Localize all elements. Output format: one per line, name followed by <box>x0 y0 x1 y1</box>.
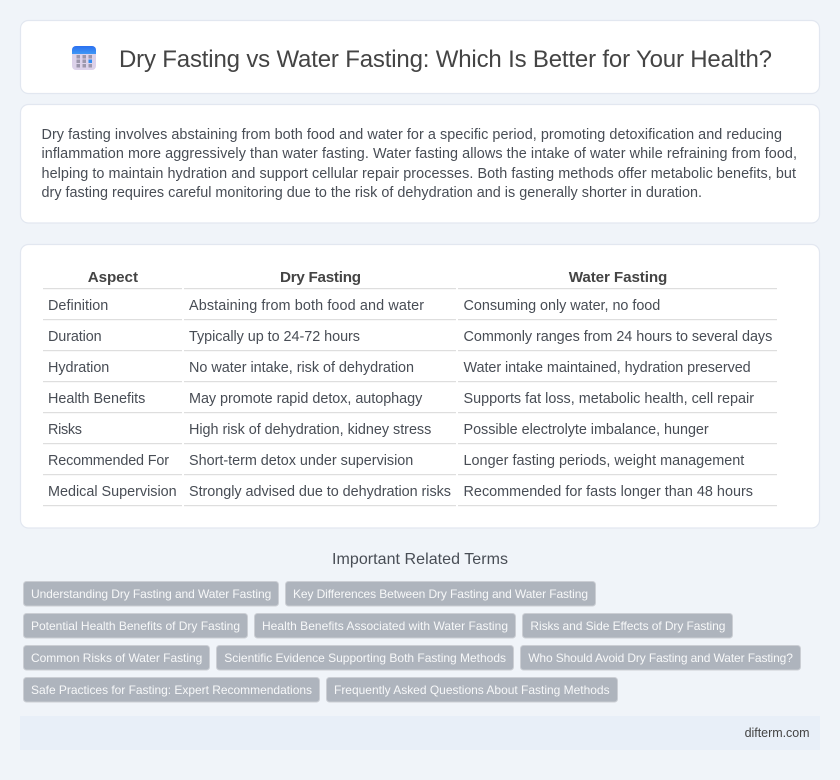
tag: understanding: Understanding Dry Fasting and Water Fasting <box>31 587 271 601</box>
table row: Definition: Consuming only water, no food <box>464 298 660 314</box>
tag: understanding <box>24 582 278 606</box>
table row: Recommended For: Recommended For <box>48 453 169 469</box>
tag: water fasting risks: Common Risks of Water Fasting <box>31 651 202 665</box>
tag: scientific evidence <box>216 646 514 670</box>
table row: Duration: Duration <box>48 329 102 345</box>
tag: safe practices <box>24 678 320 702</box>
table header row <box>43 269 777 289</box>
table row: Duration: Typically up to 24-72 hours <box>189 329 360 345</box>
tag: water fasting benefits: Health Benefits Associated with Water Fasting <box>262 619 508 633</box>
table header row: Water Fasting <box>569 269 667 286</box>
table row: Risks: Risks <box>48 422 82 438</box>
table header row: Aspect <box>88 269 138 286</box>
tag: frequently asked questions <box>326 678 618 702</box>
tag: frequently asked questions: Frequently Asked Questions About Fasting Methods <box>334 683 610 697</box>
panel: comparison table <box>20 244 820 528</box>
tag: who should avoid: Who Should Avoid Dry Fasting and Water Fasting? <box>528 651 793 665</box>
table row: Risks <box>43 422 777 444</box>
title: Dry Fasting vs Water Fasting: Which Is Better for Your Health? <box>119 46 772 73</box>
text block: introduction: helping to maintain hydration and support cellular repair processes. Both fasting methods offer metabolic benefits, but <box>42 166 796 182</box>
tag: key differences <box>286 582 596 606</box>
tag: water fasting benefits <box>254 614 516 638</box>
table row: Risks: High risk of dehydration, kidney stress <box>189 422 431 438</box>
table row: Hydration: Water intake maintained, hydration preserved <box>464 360 751 376</box>
table row: Health Benefits: Health Benefits <box>48 391 145 407</box>
footer credit: difterm.com <box>745 726 810 740</box>
text block: introduction: dry fasting requires careful monitoring due to the risk of dehydration and is generally shorter in duration. <box>42 185 702 201</box>
table row: Duration <box>43 329 777 351</box>
panel: header <box>20 20 820 94</box>
table row: Definition <box>43 298 777 320</box>
table row: Medical Supervision <box>43 484 777 506</box>
table row: Risks: Possible electrolyte imbalance, hunger <box>464 422 709 438</box>
text block: introduction <box>42 127 797 201</box>
footer bar <box>20 716 820 750</box>
tag: dry fasting benefits: Potential Health Benefits of Dry Fasting <box>31 619 240 633</box>
text block: introduction: inflammation more aggressively than water fasting. Water fasting allows the intake of water while refraining from food, <box>42 146 797 162</box>
table row: Definition: Definition <box>48 298 108 314</box>
table row: Health Benefits: Supports fat loss, metabolic health, cell repair <box>464 391 754 407</box>
table row: Medical Supervision: Medical Supervision <box>48 484 177 500</box>
table row: Recommended For <box>43 453 777 475</box>
table row: Hydration <box>43 360 777 382</box>
tag: dry fasting benefits <box>24 614 248 638</box>
table row: Health Benefits <box>43 391 777 413</box>
table row: Definition: Abstaining from both food and water <box>189 298 424 314</box>
table row: Medical Supervision: Strongly advised due to dehydration risks <box>189 484 451 500</box>
table row: Recommended For: Short-term detox under supervision <box>189 453 413 469</box>
tag: safe practices: Safe Practices for Fasting: Expert Recommendations <box>31 683 312 697</box>
panel: introduction paragraph <box>20 104 820 223</box>
text block: introduction: Dry fasting involves abstaining from both food and water for a specific period, promoting detoxification and reducing <box>42 127 782 143</box>
table row: Recommended For: Longer fasting periods, weight management <box>464 453 744 469</box>
icon: calendar <box>72 46 96 70</box>
table header row: Dry Fasting <box>280 269 361 286</box>
tag: who should avoid <box>520 646 800 670</box>
table row: Duration: Commonly ranges from 24 hours to several days <box>464 329 772 345</box>
table row: Health Benefits: May promote rapid detox, autophagy <box>189 391 423 407</box>
tag: key differences: Key Differences Between Dry Fasting and Water Fasting <box>293 587 588 601</box>
tag: dry fasting risks <box>522 614 732 638</box>
tag: water fasting risks <box>24 646 210 670</box>
table row: Medical Supervision: Recommended for fasts longer than 48 hours <box>464 484 753 500</box>
table row: Hydration: Hydration <box>48 360 109 376</box>
table row: Hydration: No water intake, risk of dehydration <box>189 360 414 376</box>
heading: related terms: Important Related Terms <box>332 551 508 568</box>
tag: dry fasting risks: Risks and Side Effects of Dry Fasting <box>530 619 725 633</box>
tag: scientific evidence: Scientific Evidence Supporting Both Fasting Methods <box>224 651 506 665</box>
related terms tag list <box>24 582 800 702</box>
